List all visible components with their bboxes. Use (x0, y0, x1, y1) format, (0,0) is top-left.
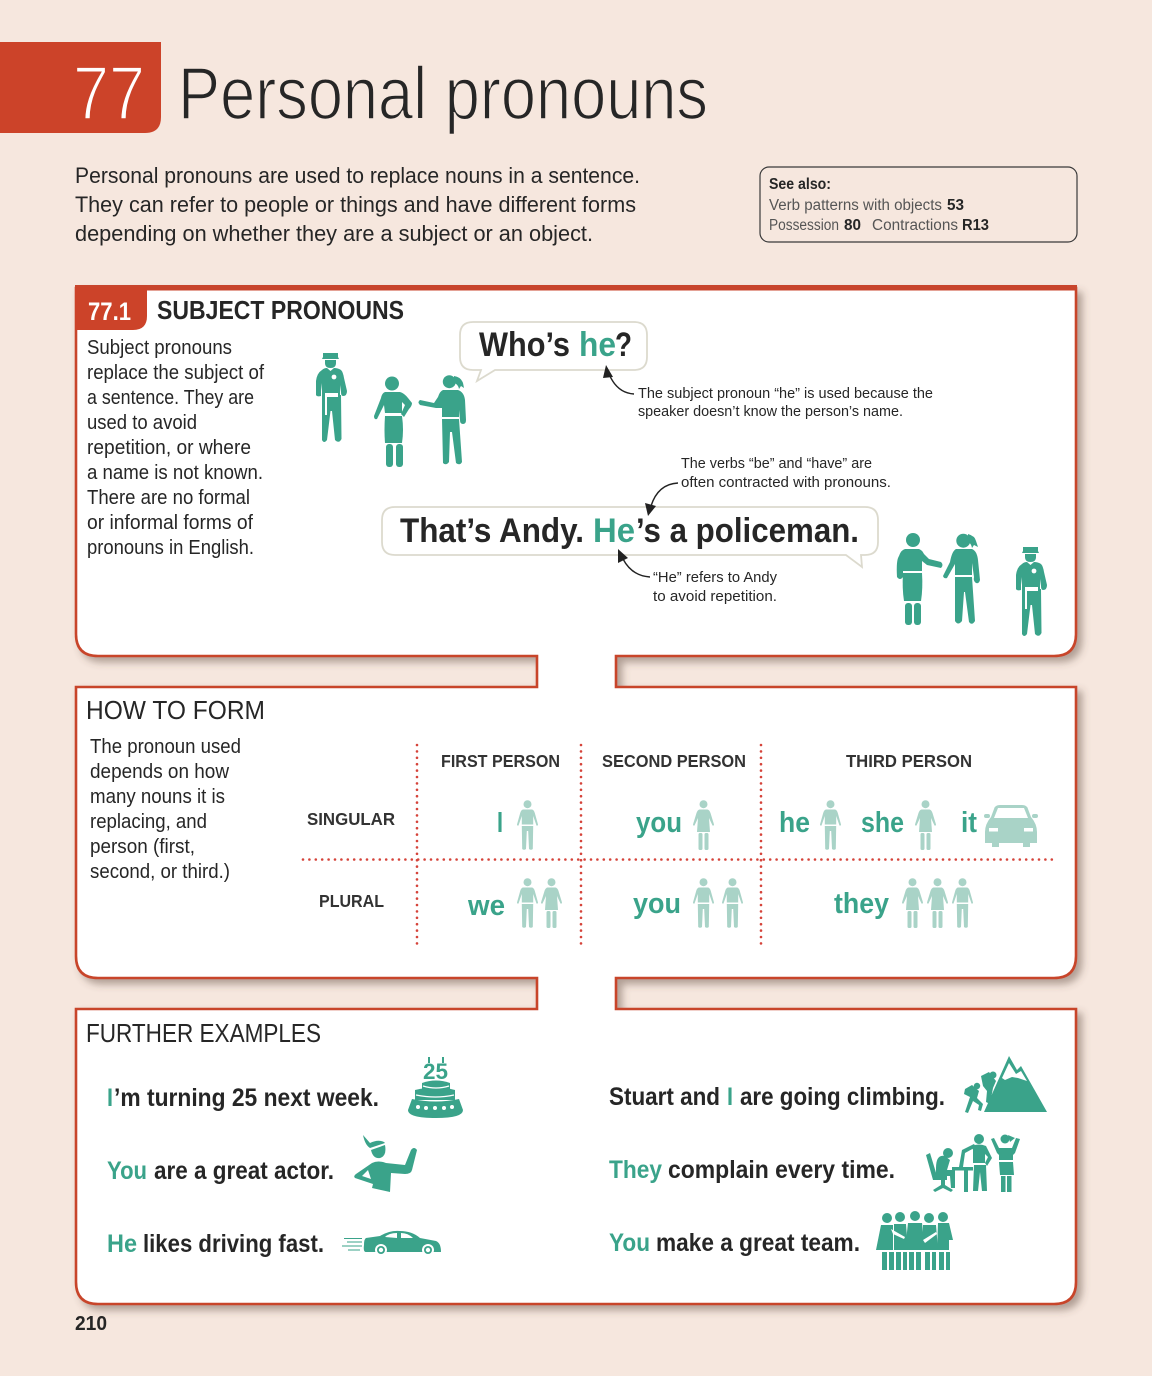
example: I'm turning 25: ’m turning 25 next week. (114, 1084, 379, 1112)
example: Stuart and I (609, 1083, 945, 1111)
explanation text: a sentence. They are (87, 387, 254, 409)
chapter title: Personal pronouns (178, 52, 708, 135)
annotation: contractions: often contracted with pronouns. (681, 475, 891, 491)
singular first person (497, 800, 538, 850)
singular third person she: she (861, 807, 904, 839)
icon: car front (984, 805, 1038, 847)
column headers: THIRD PERSON (846, 751, 972, 771)
see also box: 80 (844, 217, 861, 234)
icon: office complaint (926, 1134, 1020, 1192)
icon: woman with hand on hip (374, 376, 412, 467)
annotation: contractions (681, 456, 891, 491)
example: You make a great team: make a great team. (656, 1229, 860, 1257)
explanation text (90, 736, 241, 883)
singular third person he (779, 800, 841, 850)
speech bubble: who's he: ? (615, 326, 632, 364)
explanation text: a name is not known. (87, 462, 263, 484)
panel: subject pronouns (75, 285, 1077, 636)
annotation: subject pronoun he (638, 386, 933, 420)
arrow to contraction (645, 483, 678, 516)
annotation: subject pronoun he: The subject pronoun “he” is used because the (638, 386, 933, 402)
annotation: contractions: The verbs “be” and “have” are (681, 456, 872, 472)
example: Stuart and I: I (727, 1083, 733, 1111)
explanation text: Subject pronouns (87, 337, 232, 359)
chapter number tab (0, 42, 161, 136)
explanation text: depends on how (90, 761, 230, 783)
icon: team group (876, 1211, 953, 1270)
explanation text: many nouns it is (90, 786, 225, 808)
intro text (75, 163, 640, 246)
explanation text: replacing, and (90, 811, 207, 833)
icon: policeman (316, 353, 347, 442)
column headers (441, 751, 972, 771)
singular second person (636, 800, 714, 850)
see also box: Possession (769, 217, 839, 234)
plural first person (467, 878, 562, 928)
singular third person it (961, 805, 1038, 847)
icon: woman pointing (418, 375, 466, 464)
column headers: SECOND PERSON (602, 751, 746, 771)
icon: woman with ponytail (943, 534, 980, 624)
explanation text: The pronoun used (90, 736, 241, 758)
see also box: See also: (769, 176, 831, 193)
annotation: He refers to Andy: “He” refers to Andy (653, 570, 778, 586)
plural third person: they (834, 888, 889, 920)
example: You make a great team: You (609, 1229, 650, 1257)
singular third person she (861, 800, 936, 850)
example: I'm turning 25: I (107, 1084, 113, 1112)
speech bubble: that's Andy: He (593, 512, 635, 550)
plural second person: you (633, 888, 681, 920)
icon: woman reaching (897, 533, 942, 625)
icon: birthday cake (408, 1057, 463, 1118)
pronoun table (303, 745, 1056, 944)
intro text: depending on whether they are a subject or an object. (75, 221, 593, 246)
example: You are a great actor: are a great actor. (154, 1157, 334, 1185)
see also box: R13 (962, 217, 989, 234)
annotation: He refers to Andy (653, 570, 778, 605)
example: They complain: They (609, 1156, 662, 1184)
explanation text: second, or third.) (90, 861, 230, 883)
explanation text: There are no formal (87, 487, 250, 509)
icon: mountain climbers (964, 1056, 1047, 1113)
icon: birthday cake: 25 (423, 1059, 448, 1084)
intro text: They can refer to people or things and have different forms (75, 192, 636, 217)
see also box: Contractions (872, 217, 958, 234)
title (0, 42, 708, 136)
panel: further examples (86, 1018, 1047, 1270)
explanation text: pronouns in English. (87, 537, 254, 559)
explanation text (87, 337, 264, 559)
see also box (760, 167, 1077, 242)
row headers (307, 809, 395, 911)
icon: actor (354, 1135, 417, 1192)
example: They complain: complain every time. (668, 1156, 895, 1184)
example: He likes driving fast: likes driving fast. (143, 1230, 324, 1258)
speech bubble: who's he (460, 322, 647, 381)
example: Stuart and I: Stuart and (609, 1083, 720, 1111)
example: He likes driving fast: He (107, 1230, 137, 1258)
plural second person (633, 878, 743, 928)
speech bubble: who's he: he (579, 326, 616, 364)
intro text: Personal pronouns are used to replace nouns in a sentence. (75, 163, 640, 188)
singular second person: you (636, 807, 682, 839)
example: Stuart and I: are going climbing. (740, 1083, 945, 1111)
plural first person: we (467, 890, 505, 922)
annotation: subject pronoun he: speaker doesn’t know the person’s name. (638, 404, 903, 420)
chapter number tab: 77 (73, 51, 145, 136)
section heading: FURTHER EXAMPLES (86, 1018, 321, 1048)
icon: policeman right (1016, 547, 1047, 636)
see also box: 53 (947, 197, 964, 214)
speech bubble: that's Andy: ’s a policeman. (636, 512, 859, 550)
row headers: PLURAL (319, 891, 384, 911)
explanation text: repetition, or where (87, 437, 251, 459)
row headers: SINGULAR (307, 809, 395, 829)
speech bubble: that's Andy (382, 507, 878, 567)
plural third person (834, 878, 973, 928)
arrow to he (603, 365, 634, 394)
see also box: Verb patterns with objects (769, 197, 942, 214)
arrow to He (618, 549, 650, 577)
explanation text: or informal forms of (87, 512, 253, 534)
page number: 210 (75, 1313, 107, 1335)
explanation text: replace the subject of (87, 362, 264, 384)
speech bubble: that's Andy: That’s Andy. (400, 512, 584, 550)
section number tab: 77.1 (88, 298, 131, 326)
section heading: SUBJECT PRONOUNS (157, 295, 404, 325)
example: You are a great actor: You (107, 1157, 147, 1185)
explanation text: person (first, (90, 836, 195, 858)
singular third person it: it (961, 807, 977, 839)
annotation: He refers to Andy: to avoid repetition. (653, 589, 777, 605)
section heading: HOW TO FORM (86, 695, 265, 725)
panel outline: connected white panels (76, 288, 1076, 1304)
singular first person: I (497, 807, 503, 839)
icon: speeding car (342, 1231, 441, 1256)
column headers: FIRST PERSON (441, 751, 560, 771)
panel: how to form (86, 695, 1056, 944)
speech bubble: who's he: Who’s (479, 326, 570, 364)
explanation text: used to avoid (87, 412, 197, 434)
section number tab (75, 287, 147, 330)
singular third person he: he (779, 807, 810, 839)
